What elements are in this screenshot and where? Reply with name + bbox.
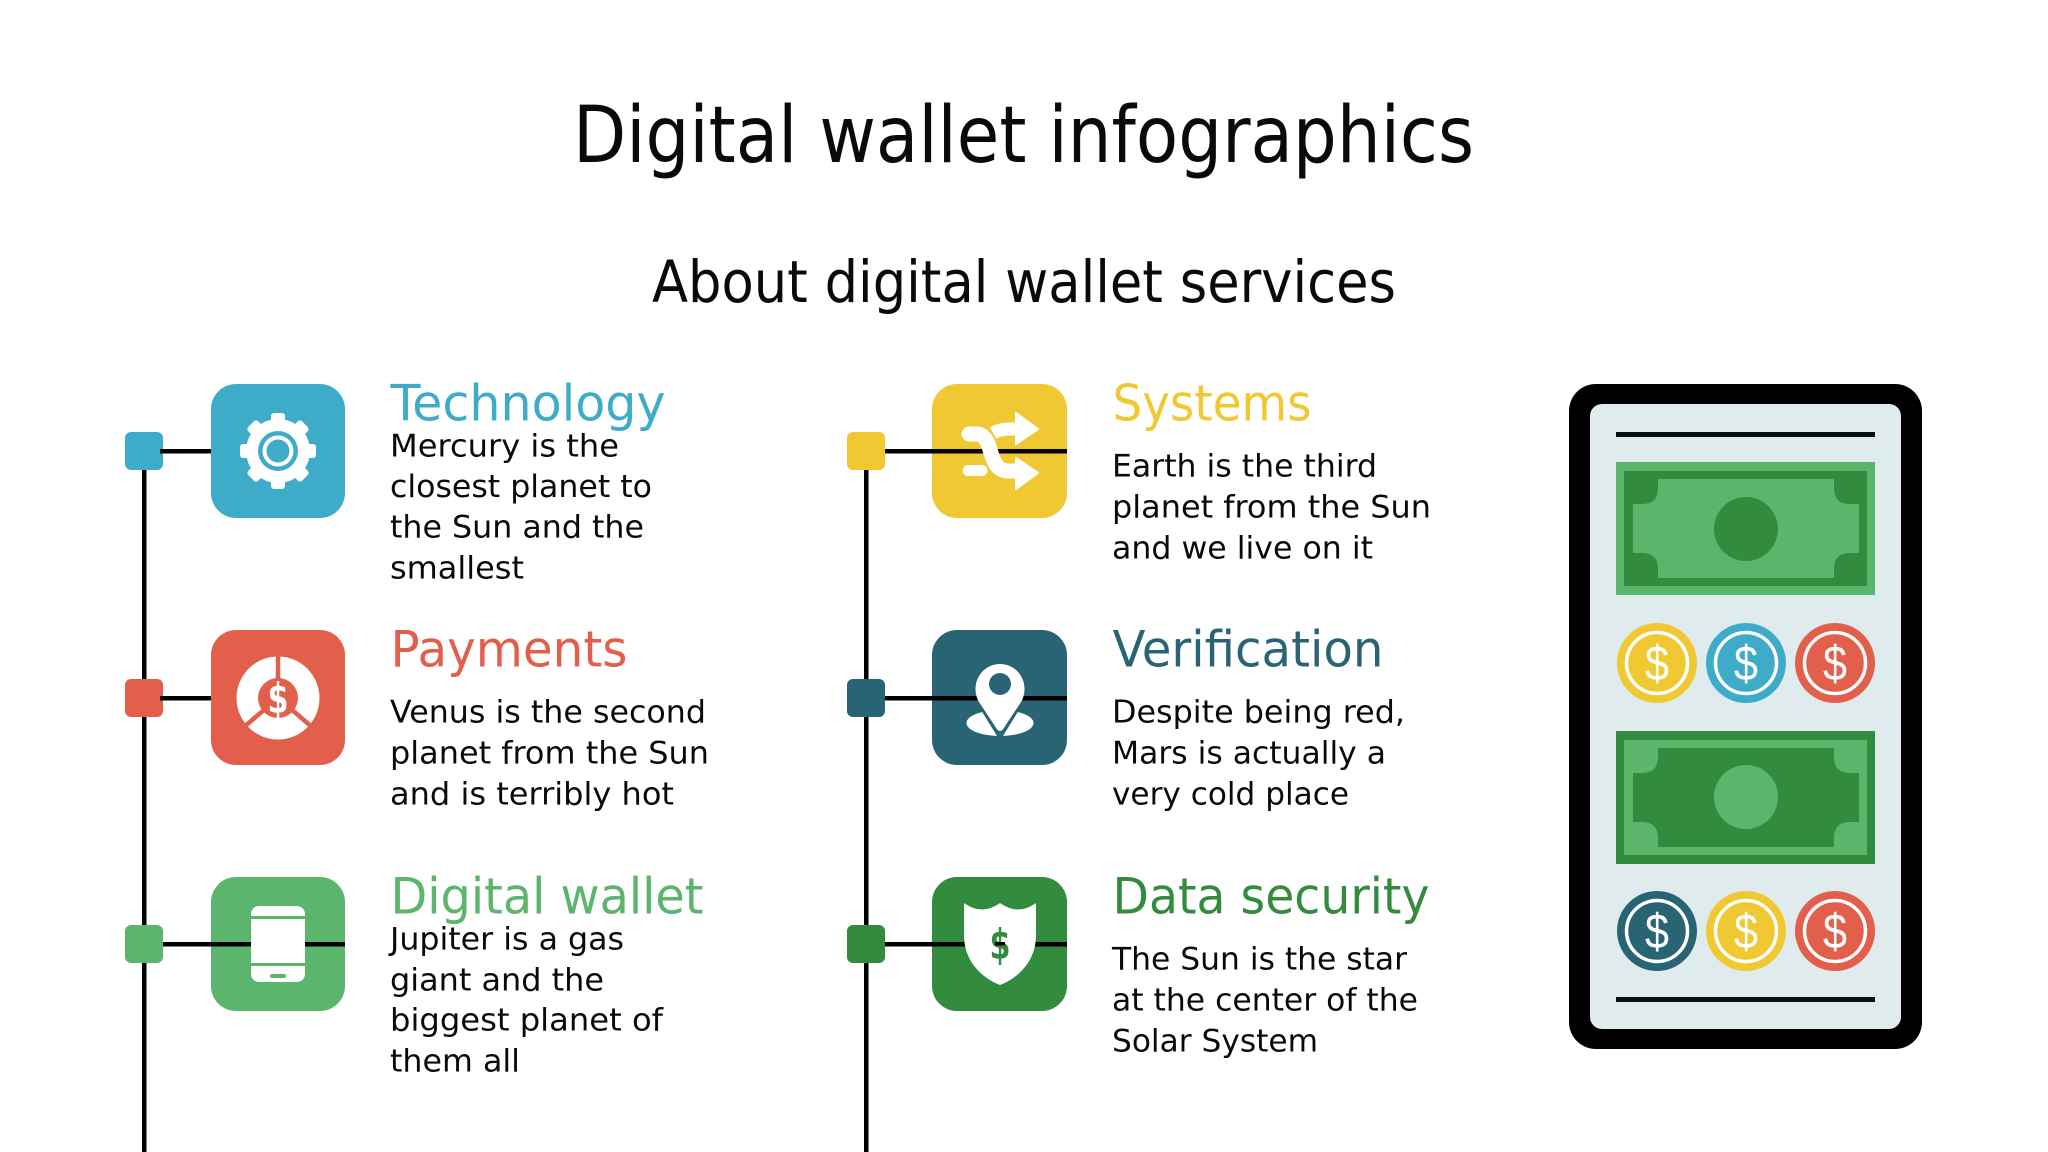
text: Technology description: the Sun and the: [390, 510, 644, 546]
coins row two: [1617, 891, 1875, 971]
banknote: light green: [1616, 462, 1875, 595]
heading: Systems: Systems: [1112, 374, 1312, 432]
coin: yellow: $: [1645, 635, 1669, 691]
icon: dollar shield: [880, 877, 1067, 1011]
heading: Payments: Payments: [390, 620, 628, 678]
bottom screen line: [1616, 997, 1875, 1002]
heading: Technology: Technology: [390, 374, 666, 432]
text: Technology description: smallest: [390, 550, 524, 586]
node: Digital wallet: [125, 925, 163, 963]
text: Digital wallet description: them all: [390, 1044, 520, 1080]
icon: gear: [211, 384, 345, 518]
timeline vertical line left: [142, 451, 146, 1152]
text: Data security description: The Sun is the star: [1111, 942, 1407, 978]
title: Digital wallet infographics: [573, 91, 1474, 181]
phone body: [1569, 384, 1922, 1049]
panel: phone illustration: [1569, 384, 1922, 1049]
node: Systems: [847, 432, 885, 470]
connector: Technology: [160, 449, 215, 454]
text: Payments description: planet from the Sun: [390, 736, 709, 772]
item: Systems: [847, 374, 1431, 566]
connector: Payments: [160, 696, 215, 700]
heading: Verification: Verification: [1112, 620, 1384, 678]
text: Payments description: Venus is the second: [390, 694, 706, 730]
item: Verification: [847, 620, 1405, 812]
text: Payments description: [390, 694, 709, 812]
icon: dollar shield: $: [989, 920, 1011, 969]
text: Payments description: and is terribly hot: [390, 776, 674, 812]
node: Payments: [125, 679, 163, 717]
node: Technology: [125, 432, 163, 470]
node: Verification: [847, 679, 885, 717]
coin: red: $: [1823, 635, 1847, 691]
coin: yellow: $: [1734, 903, 1758, 959]
coin: teal: $: [1645, 903, 1669, 959]
subtitle: About digital wallet services: [652, 248, 1396, 316]
text: Systems description: [1112, 448, 1431, 566]
text: Data security description: [1111, 942, 1418, 1060]
item: Payments: [125, 620, 709, 812]
icon: shuffle arrows: [880, 384, 1067, 518]
item: Digital wallet: [125, 868, 704, 1080]
coin: yellow: [1617, 623, 1697, 703]
text: Technology description: Mercury is the: [390, 428, 619, 464]
text: Verification description: [1112, 694, 1405, 812]
heading: Digital wallet: Digital wallet: [390, 868, 704, 926]
node: Data security: [847, 925, 885, 963]
top screen line: [1616, 432, 1875, 437]
icon: smartphone: [160, 877, 345, 1011]
text: Digital wallet description: giant and the: [390, 962, 604, 998]
text: Digital wallet description: biggest planet of: [390, 1002, 664, 1038]
text: Verification description: very cold place: [1112, 776, 1349, 812]
banknote: dark green: [1616, 731, 1875, 864]
coin: teal: [1617, 891, 1697, 971]
item: Technology: [125, 374, 666, 586]
panel: left timeline column: [125, 374, 709, 1152]
coin: red: [1795, 891, 1875, 971]
coin: red: $: [1823, 903, 1847, 959]
coin: red: [1795, 623, 1875, 703]
timeline vertical line middle: [864, 451, 868, 1152]
item: Data security: [847, 868, 1430, 1060]
coin: blue: [1706, 623, 1786, 703]
text: Systems description: Earth is the third: [1112, 448, 1377, 484]
text: Data security description: Solar System: [1112, 1024, 1318, 1060]
text: Digital wallet description: [388, 922, 664, 1080]
text: Systems description: planet from the Sun: [1112, 490, 1431, 526]
text: Verification description: Mars is actually a: [1112, 736, 1386, 772]
text: Technology description: closest planet to: [390, 469, 652, 505]
text: Verification description: Despite being red,: [1112, 694, 1405, 730]
icon: dollar pie chart: [211, 630, 345, 765]
icon: dollar pie chart: $: [267, 674, 289, 723]
heading: Data security: Data security: [1112, 868, 1430, 926]
text: Technology description: [390, 428, 652, 586]
panel: middle timeline column: [847, 374, 1431, 1152]
icon: location pin: [880, 630, 1067, 765]
coin: yellow: [1706, 891, 1786, 971]
coin: blue: $: [1734, 635, 1758, 691]
coins row one: [1617, 623, 1875, 703]
text: Data security description: at the center of the: [1112, 982, 1418, 1018]
text: Digital wallet description: Jupiter is a gas: [388, 922, 624, 958]
text: Systems description: and we live on it: [1112, 530, 1373, 566]
phone screen: [1590, 404, 1901, 1029]
